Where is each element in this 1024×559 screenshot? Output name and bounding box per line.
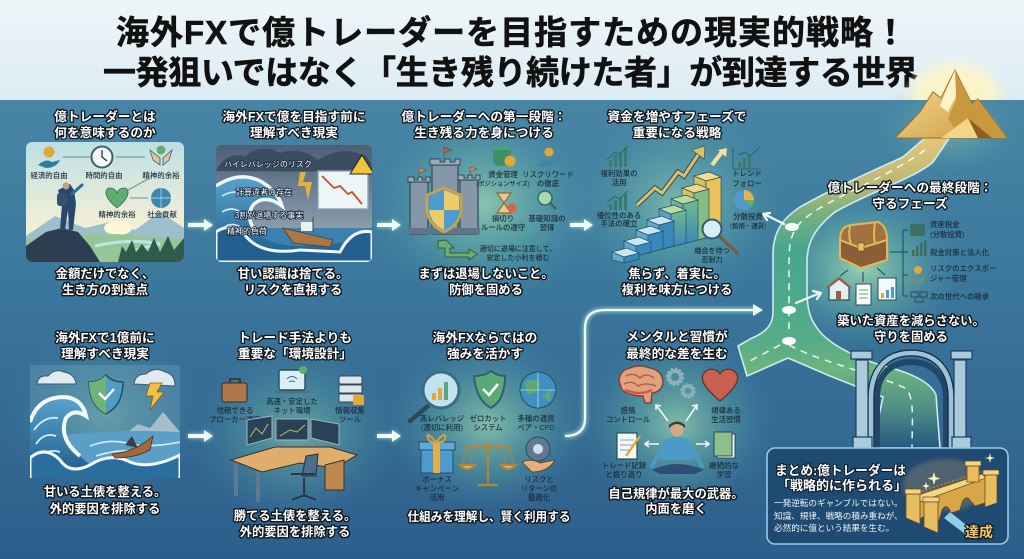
labels 4: トレンド (732, 169, 762, 178)
heading 9: 守るフェーズ (872, 196, 948, 211)
heading 7: 海外FXならではの (433, 330, 537, 345)
labels 9: 資産税金 (930, 220, 960, 229)
icon: shield check (89, 375, 123, 414)
labels 7: 活用 (430, 493, 444, 502)
icon: globe (151, 188, 171, 208)
summary heading: 「戦略的に作られる」 (777, 478, 907, 493)
labels 9: (分散投資) (930, 230, 964, 239)
labels 7: リターンの (521, 484, 557, 493)
caption 9 (837, 313, 985, 344)
heading 5 (55, 330, 155, 361)
icon: document chart (878, 278, 896, 300)
heading 7: 強みを活かす (447, 346, 523, 361)
heading 4: 重要になる戦略 (633, 125, 722, 140)
labels 3: の徹底 (537, 179, 560, 188)
arrows: growth (637, 146, 727, 205)
caption 1 (56, 266, 154, 297)
caption 2: リスクを直視する (244, 282, 342, 297)
caption 1: 生き方の到達点 (62, 282, 148, 297)
heading 9: 億トレーダーへの最終段階： (828, 180, 992, 195)
labels 7: キャンペーン (415, 484, 459, 493)
icon: heart (702, 369, 738, 401)
labels 4: 機会を待つ (694, 246, 730, 255)
labels 9: リスクのエクスポー (930, 264, 996, 273)
icon: house (827, 278, 851, 300)
panel: strengths of overseas FX (408, 330, 570, 524)
icon: trading desk (231, 416, 357, 502)
panel: summary (767, 448, 1008, 544)
icon: pie chart (734, 190, 754, 210)
panel: mindset and habits (602, 329, 744, 516)
icon: coin stack (493, 146, 516, 166)
caption 3: まずは退場しないこと。 (418, 266, 554, 281)
small icons (910, 224, 927, 302)
labels 8 (602, 406, 741, 479)
labels 7: ゼロカット (470, 414, 506, 423)
icon: gears (666, 368, 695, 398)
labels 4: 複利効果の (601, 169, 637, 178)
heading 3: 生き残る力を身につける (414, 125, 554, 140)
heading 2 (222, 109, 366, 140)
labels 8: コントロール (606, 415, 651, 424)
caption 2 (238, 266, 348, 297)
labels 9: 次の世代への継承 (930, 292, 990, 301)
labels 4: 手法の確立 (601, 219, 638, 228)
heading 2: 海外FXで億を目指す前に (222, 109, 366, 124)
heading 1 (54, 109, 156, 140)
heading 3 (402, 109, 566, 140)
caption 5: 甘いる土俵を整える。 (44, 484, 166, 499)
icon: hourglass (497, 193, 516, 213)
illustration: storm and wave: ハイレバレッジのリスク (224, 160, 312, 169)
caption 6: 外的要因を排除する (240, 524, 350, 539)
heading 7 (433, 330, 537, 361)
icon: green arrows (438, 240, 477, 260)
panel: final stage protect (827, 180, 996, 344)
labels 7: 最適化 (528, 493, 551, 502)
labels 4 (597, 169, 766, 264)
labels 6: 情報収集 (335, 406, 365, 415)
labels 3: 習得 (540, 223, 555, 232)
icon: treasure chest (840, 222, 887, 268)
panel: environment design (209, 330, 365, 539)
summary body: 必然的に億という結果を生む。 (774, 522, 894, 533)
icon: magnifier chart (410, 372, 459, 421)
summary heading: まとめ:億トレーダーは (775, 463, 906, 478)
caption 3 (418, 266, 554, 297)
caption 9: 守りを固める (874, 329, 948, 344)
caption 8 (608, 486, 744, 516)
labels 8: トレード記録 (602, 461, 647, 470)
caption 6: 勝てる土俵を整える。 (234, 508, 356, 523)
panel: what is an oku trader (26, 109, 184, 297)
labels 9 (930, 220, 996, 301)
caption 8: 内面を磨く (645, 501, 707, 516)
illustration: man on summit (26, 142, 184, 262)
labels 6: ブローカー選定 (209, 415, 261, 424)
road to the summit (738, 137, 950, 448)
labels 8: 学習 (717, 470, 731, 479)
icon: hands with leaf (150, 146, 172, 165)
labels 4: (銘柄・通貨) (730, 221, 766, 230)
labels 3: ルールの遵守 (481, 223, 525, 232)
icon: hand coin (535, 148, 559, 167)
arrows: mind map (645, 405, 709, 447)
labels 6: 高速・安定した (266, 397, 318, 406)
panel: reality to understand (216, 109, 374, 297)
labels 8: 感情 (621, 406, 636, 415)
icon: document (856, 284, 871, 305)
labels 3: 損切り (492, 214, 514, 223)
panel: what you need before 1 oku (30, 330, 180, 516)
heading 4: 資金を増やすフェーズで (608, 109, 746, 124)
chart: rising staircase (612, 172, 721, 263)
labels 4: 活用 (612, 178, 626, 187)
heading 6: 重要な「環境設計」 (238, 346, 352, 361)
labels 8: 規律ある (711, 406, 741, 415)
caption 2: 甘い認識は捨てる。 (238, 266, 348, 281)
icon: books (714, 432, 735, 458)
panel: first stage survive (402, 109, 574, 297)
heading 2: 理解すべき現実 (250, 125, 338, 140)
icon: server lock (339, 376, 364, 405)
labels 6: ツール (339, 415, 362, 424)
summary body: 知識、規律、戦略の積み重ねが、 (774, 510, 903, 521)
labels 4: 分散投資 (733, 212, 763, 221)
icon: notepad (617, 433, 640, 459)
heading 3: 億トレーダーへの第一段階： (402, 109, 566, 124)
caption 6 (234, 508, 356, 539)
heading 9 (828, 180, 992, 211)
labels 7: 高レバレッジ (420, 414, 465, 423)
labels 7 (415, 414, 557, 502)
labels 3: (ポジションサイズ) (476, 180, 530, 188)
caption 4: 複利を味方につける (622, 282, 732, 297)
labels 3: 適切に退場に注意して、 (480, 244, 556, 253)
icon: heart (106, 188, 128, 208)
illustration: storm and wave (216, 145, 374, 262)
illustration: storm and wave: 精神的負荷 (227, 226, 267, 236)
caption 7: 仕組みを理解し、賢く利用する (408, 509, 570, 524)
icon: clouds (37, 369, 175, 386)
illustration: shield over wave (30, 365, 180, 480)
heading 5: 海外FXで1億前に (55, 330, 155, 345)
labels 3: 安定した小利を積む (486, 253, 550, 262)
icon: meditating person (652, 422, 704, 474)
header band (0, 0, 1024, 100)
icon: magnifier (538, 191, 556, 209)
labels 3 (476, 170, 574, 262)
heading 1: 何を意味するのか (54, 125, 156, 140)
labels 4: 忍耐力 (702, 255, 722, 264)
labels 8: 継続的な (709, 461, 739, 470)
caption 4: 焦らず、着実に。 (628, 266, 726, 281)
icon: laptop wifi (275, 366, 309, 393)
panel: growth phase strategy (597, 109, 766, 297)
icon: shield (474, 371, 505, 408)
labels 7: システム (473, 423, 503, 432)
icon: gift (419, 435, 455, 473)
icon: gear in hand (522, 437, 555, 472)
icon: globe (520, 372, 556, 408)
illustration: storm and wave: 計算違者の存在 (236, 187, 292, 197)
labels 4: 優位性のある (597, 211, 641, 220)
caption 5 (44, 484, 166, 516)
title: 一発狙いではなく「生き残り続けた者」が到達する世界 (103, 54, 918, 91)
small chart icons (607, 146, 760, 210)
labels 7: ボーナス (422, 475, 452, 484)
illustration: man on summit: 精神的余裕 (99, 210, 136, 219)
summary body (774, 497, 903, 533)
title: 海外FXで億トレーダーを目指すための現実的戦略！ (116, 14, 907, 51)
labels 3: リスクリワード (522, 170, 574, 179)
caption 9: 築いた資産を減らさない。 (837, 313, 985, 328)
caption 8: 自己規律が最大の武器。 (608, 486, 744, 501)
icon: lightning (146, 383, 164, 410)
labels 6 (209, 397, 365, 424)
icon: magnifier (702, 220, 738, 254)
caption 4 (622, 266, 732, 297)
glow behind panels (5, 80, 1024, 525)
labels 7: リスクと (524, 475, 554, 484)
caption 1: 金額だけでなく、 (56, 266, 154, 281)
labels 7: ペア・CFD (517, 423, 555, 432)
labels 8: と振り返り (606, 470, 642, 479)
badge: achieved: 達成 (965, 524, 993, 540)
illustration: storm and wave: 3割が退場する事実 (235, 210, 303, 220)
heading 8: メンタルと習慣が (626, 329, 728, 344)
summary heading (775, 463, 907, 493)
icon: golden mountain (895, 56, 1009, 144)
labels 4: フォロー (732, 179, 762, 188)
caption 3: 防御を固める (449, 282, 523, 297)
icon: stone arch gate (851, 351, 972, 448)
heading 6: トレード手法よりも (238, 330, 352, 345)
labels 9: 税金対策と法人化 (930, 248, 990, 257)
illustration: man on summit: 社会貢献 (147, 210, 177, 219)
summary body: 一発逆転のギャンブルではない。 (774, 497, 903, 508)
labels 6: ネット環境 (274, 406, 311, 415)
icon: briefcase (222, 379, 247, 402)
labels 3: 基礎知識の (529, 214, 565, 223)
caption 5: 外的要因を排除する (50, 501, 160, 516)
labels 3: 資金管理 (488, 170, 518, 179)
icon: castle and shield (408, 147, 480, 234)
heading 8 (626, 329, 728, 361)
road branch arrows (763, 213, 821, 303)
labels 9: ジャー管理 (930, 274, 967, 283)
arrows: between panels (188, 219, 593, 442)
heading 4 (608, 109, 746, 140)
labels 7: 多種の通貨 (518, 414, 555, 423)
icon: brain (619, 366, 663, 403)
illustration: man on summit: 精神的余裕 (143, 171, 180, 180)
labels 6: 信頼できる (217, 406, 253, 415)
labels 8: 生活習慣 (711, 415, 741, 424)
icon: scale (460, 442, 516, 485)
heading 1: 億トレーダーとは (54, 109, 156, 124)
icon: golden castle bridge (903, 453, 999, 534)
illustration: man on summit: 経済的自由 (31, 171, 67, 180)
labels 7: (適切に利用) (421, 423, 463, 432)
illustration: man on summit: 時間的自由 (86, 171, 122, 180)
icon: clock (92, 146, 112, 168)
heading 8: 最終的な差を生む (626, 346, 728, 361)
heading 5: 理解すべき現実 (61, 346, 149, 361)
heading 6 (238, 330, 352, 361)
icon: hand and coin (38, 146, 60, 168)
title (103, 14, 918, 91)
connector arrow to road (565, 304, 763, 436)
